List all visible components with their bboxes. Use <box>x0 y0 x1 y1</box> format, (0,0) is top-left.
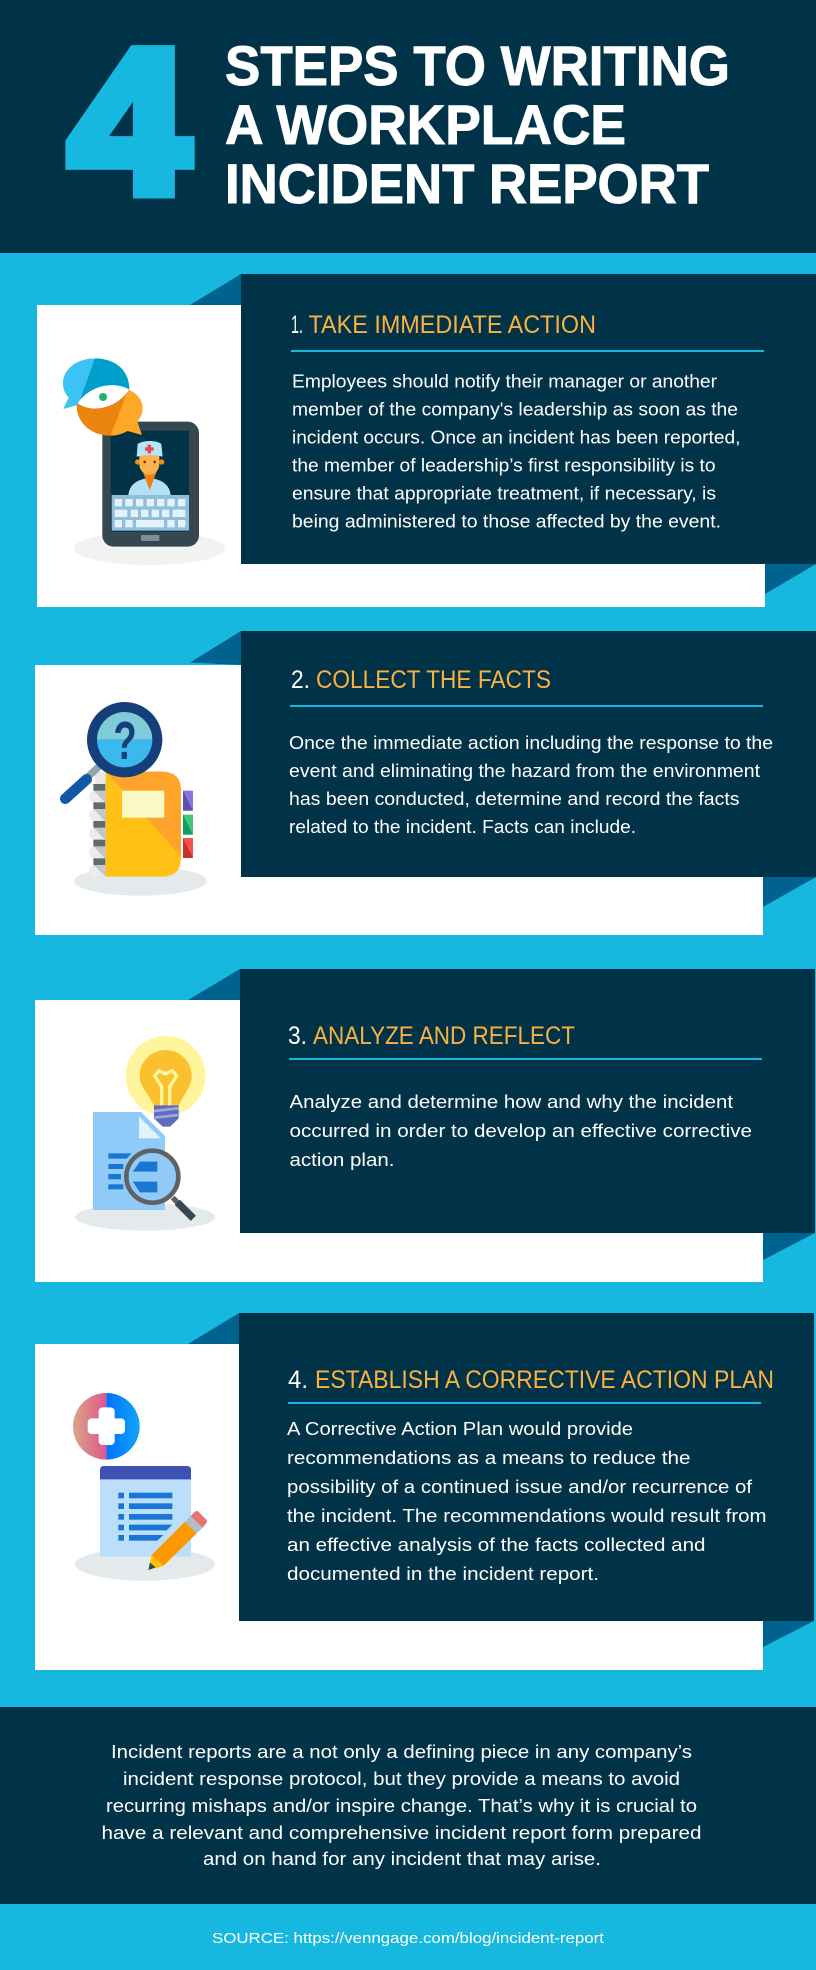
panel: step 1 <box>37 274 816 607</box>
icon: checklist, medical cross and pencil <box>73 1393 215 1581</box>
panel: step 4 <box>35 1313 814 1670</box>
title: STEPS TO WRITING <box>225 34 730 97</box>
panel: conclusion <box>0 1707 816 1904</box>
heading: step 3: ANALYZE AND REFLECT <box>313 1022 575 1050</box>
heading: step 2: 2. <box>291 666 310 694</box>
text: step 3 body: occurred in order to develop an effective corrective <box>290 1120 752 1141</box>
text: conclusion: recurring mishaps and/or inspire change. That’s why it is crucial to <box>106 1795 697 1816</box>
text: step 4 body: documented in the incident report. <box>287 1563 599 1584</box>
text: step 2 body: Once the immediate action including the response to the <box>289 732 773 753</box>
text: conclusion: and on hand for any incident that may arise. <box>203 1848 601 1869</box>
text: step 4 body: recommendations as a means to reduce the <box>287 1447 690 1468</box>
text: step 3 body: action plan. <box>290 1149 394 1170</box>
text: step 3 body <box>290 1091 752 1170</box>
icon: tablet with doctor and speech bubbles <box>63 358 225 565</box>
text: step 4 body: an effective analysis of the facts collected and <box>287 1534 706 1555</box>
header banner <box>0 0 816 253</box>
text: conclusion: have a relevant and comprehensive incident report form prepared <box>102 1822 702 1843</box>
text: step 4 body: the incident. The recommendations would result from <box>287 1505 766 1526</box>
text: step 2 body: related to the incident. Facts can include. <box>289 816 636 837</box>
text: step 2 body <box>289 732 773 837</box>
big number 4: 4 <box>69 8 189 236</box>
text: step 4 body <box>287 1418 766 1584</box>
text: conclusion: Incident reports are a not only a defining piece in any company’s <box>111 1741 692 1762</box>
text: step 3 body: Analyze and determine how and why the incident <box>290 1091 733 1112</box>
text: conclusion <box>102 1741 702 1869</box>
text: step 2 body: has been conducted, determine and record the facts <box>289 788 740 809</box>
heading: step 1: TAKE IMMEDIATE ACTION <box>308 311 596 339</box>
heading: step 4: ESTABLISH A CORRECTIVE ACTION PLAN <box>315 1366 774 1394</box>
icon: document, light bulb and magnifier <box>75 1036 215 1231</box>
heading: step 1: 1. <box>291 311 303 339</box>
icon text: question mark: ? <box>113 712 137 771</box>
text: step 1 body: Employees should notify their manager or another <box>292 370 717 392</box>
text: step 1 body <box>292 370 740 532</box>
heading: step 4: 4. <box>288 1366 308 1394</box>
title <box>225 34 730 215</box>
text: step 1 body: being administered to those affected by the event. <box>292 510 721 532</box>
text: step 2 body: event and eliminating the hazard from the environment <box>289 760 760 781</box>
text: conclusion: incident response protocol, but they provide a means to avoid <box>123 1768 680 1789</box>
text: step 1 body: member of the company's leadership as soon as the <box>292 398 738 420</box>
text: step 1 body: the member of leadership’s first responsibility is to <box>292 454 716 476</box>
title: A WORKPLACE <box>225 93 626 156</box>
text: step 1 body: incident occurs. Once an incident has been reported, <box>292 426 740 448</box>
heading: step 3: 3. <box>288 1022 307 1050</box>
heading: step 2: COLLECT THE FACTS <box>316 666 551 694</box>
panel: step 2 <box>35 631 816 935</box>
source line: SOURCE: https://venngage.com/blog/incident-report <box>212 1930 605 1947</box>
title: INCIDENT REPORT <box>225 152 709 215</box>
text: step 4 body: A Corrective Action Plan would provide <box>287 1418 633 1439</box>
text: step 4 body: possibility of a continued issue and/or recurrence of <box>287 1476 753 1497</box>
text: step 1 body: ensure that appropriate treatment, if necessary, is <box>292 482 716 504</box>
icon: notebook with magnifier <box>65 702 207 896</box>
panel: step 3 <box>35 969 815 1282</box>
